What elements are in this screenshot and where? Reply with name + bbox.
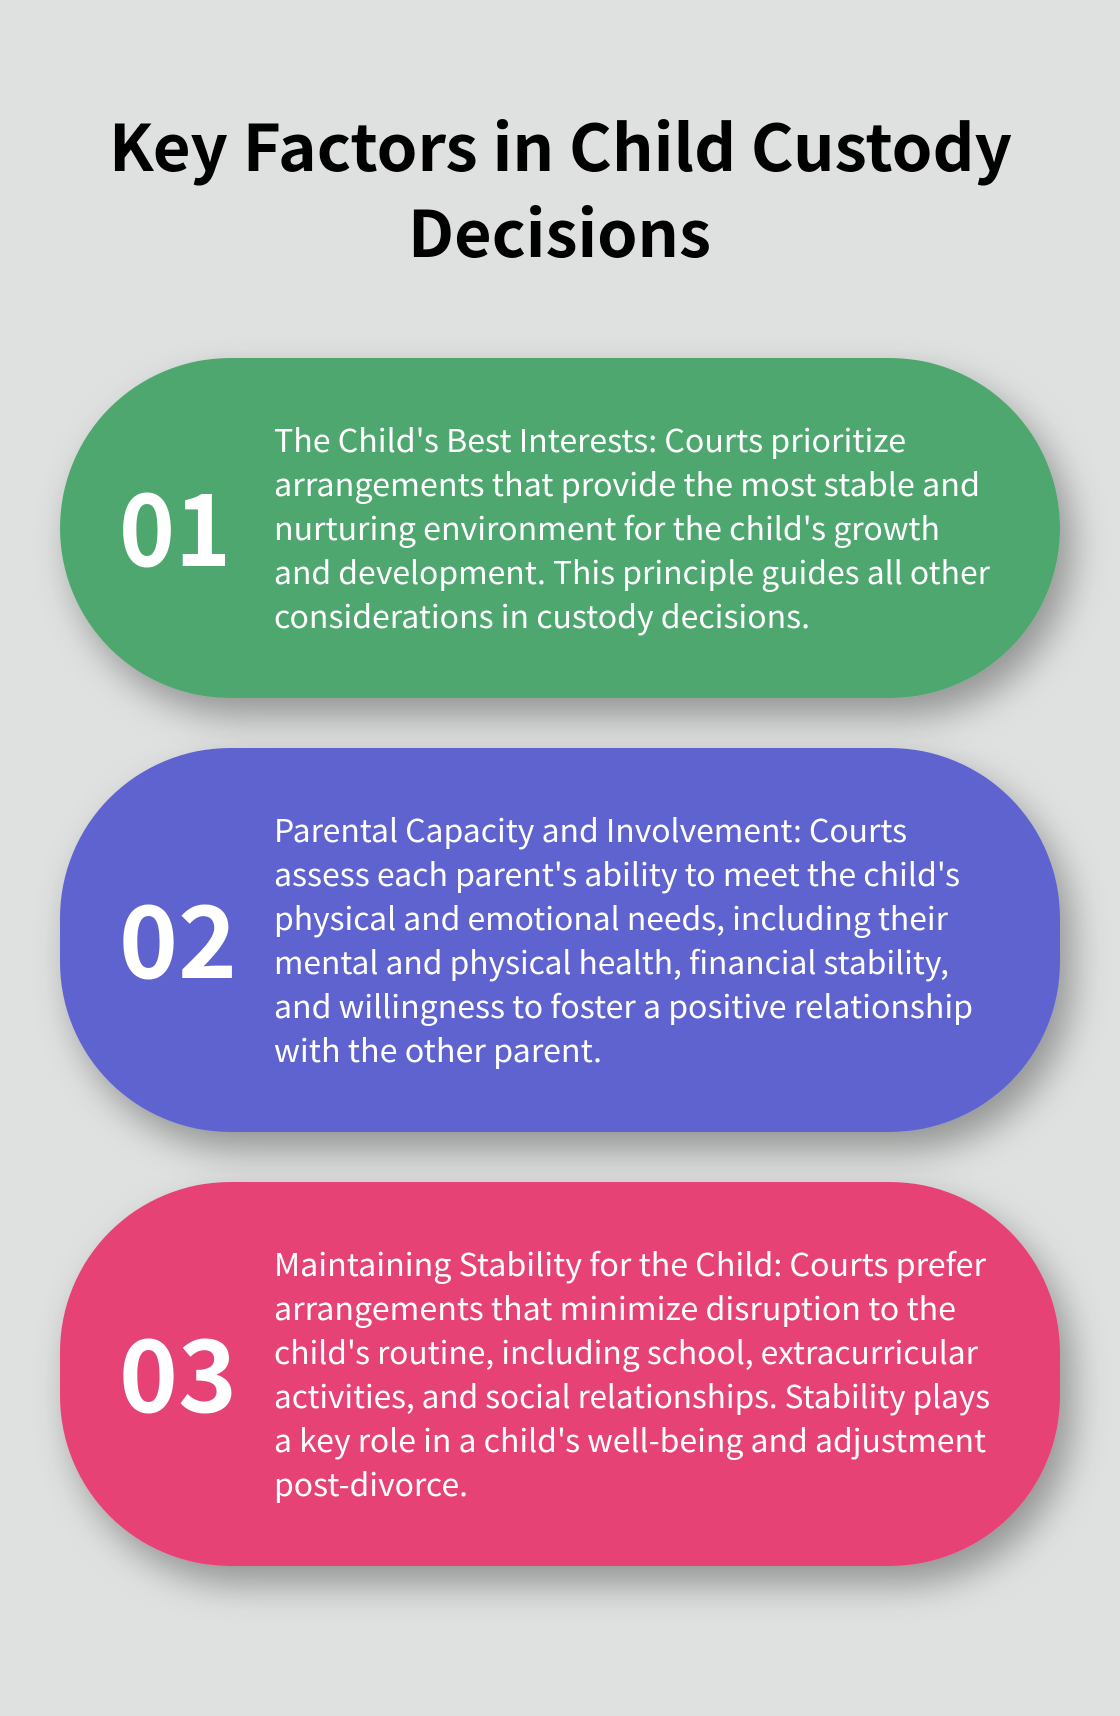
text block: best interests: considerations in custody decisions. [274,592,810,638]
text block: stability: post-divorce. [274,1460,468,1506]
text block: best interests: arrangements that provide the most stable and [274,460,980,506]
number 02: 02 [119,862,237,1007]
blue pill background [60,748,1060,1132]
green pill background [60,358,1060,698]
text block: parental capacity: mental and physical health, financial stability, [274,938,949,984]
number 03: 03 [119,1296,237,1441]
title: Decisions [408,184,711,276]
text block: parental capacity: and willingness to foster a positive relationship [274,982,973,1028]
text block: stability: a key role in a child's well-being and adjustment [274,1416,986,1462]
text block: parental capacity: with the other parent. [274,1026,602,1072]
text block: stability: child's routine, including school, extracurricular [274,1328,979,1374]
text block: stability: activities, and social relationships. Stability plays [274,1372,990,1418]
text block: parental capacity: assess each parent's ability to meet the child's [274,850,960,896]
text block: parental capacity: Parental Capacity and Involvement: Courts [274,806,907,852]
pink pill background [60,1182,1060,1566]
text block: best interests: and development. This principle guides all other [274,548,991,594]
title [109,98,1012,276]
text block: best interests: nurturing environment for the child's growth [274,504,940,550]
panel: maintaining stability [60,1182,1060,1566]
panel: the child's best interests [60,358,1060,698]
text block: parental capacity [274,806,973,1072]
text block: stability [274,1240,990,1506]
panel: parental capacity and involvement [60,748,1060,1132]
number 01: 01 [119,450,231,595]
text block: parental capacity: physical and emotional needs, including their [274,894,949,940]
text block: best interests: The Child's Best Interests: Courts prioritize [274,416,906,462]
text block: stability: Maintaining Stability for the Child: Courts prefer [274,1240,987,1286]
title: Key Factors in Child Custody [109,98,1012,190]
text block: best interests [274,416,991,638]
text block: stability: arrangements that minimize disruption to the [274,1284,956,1330]
